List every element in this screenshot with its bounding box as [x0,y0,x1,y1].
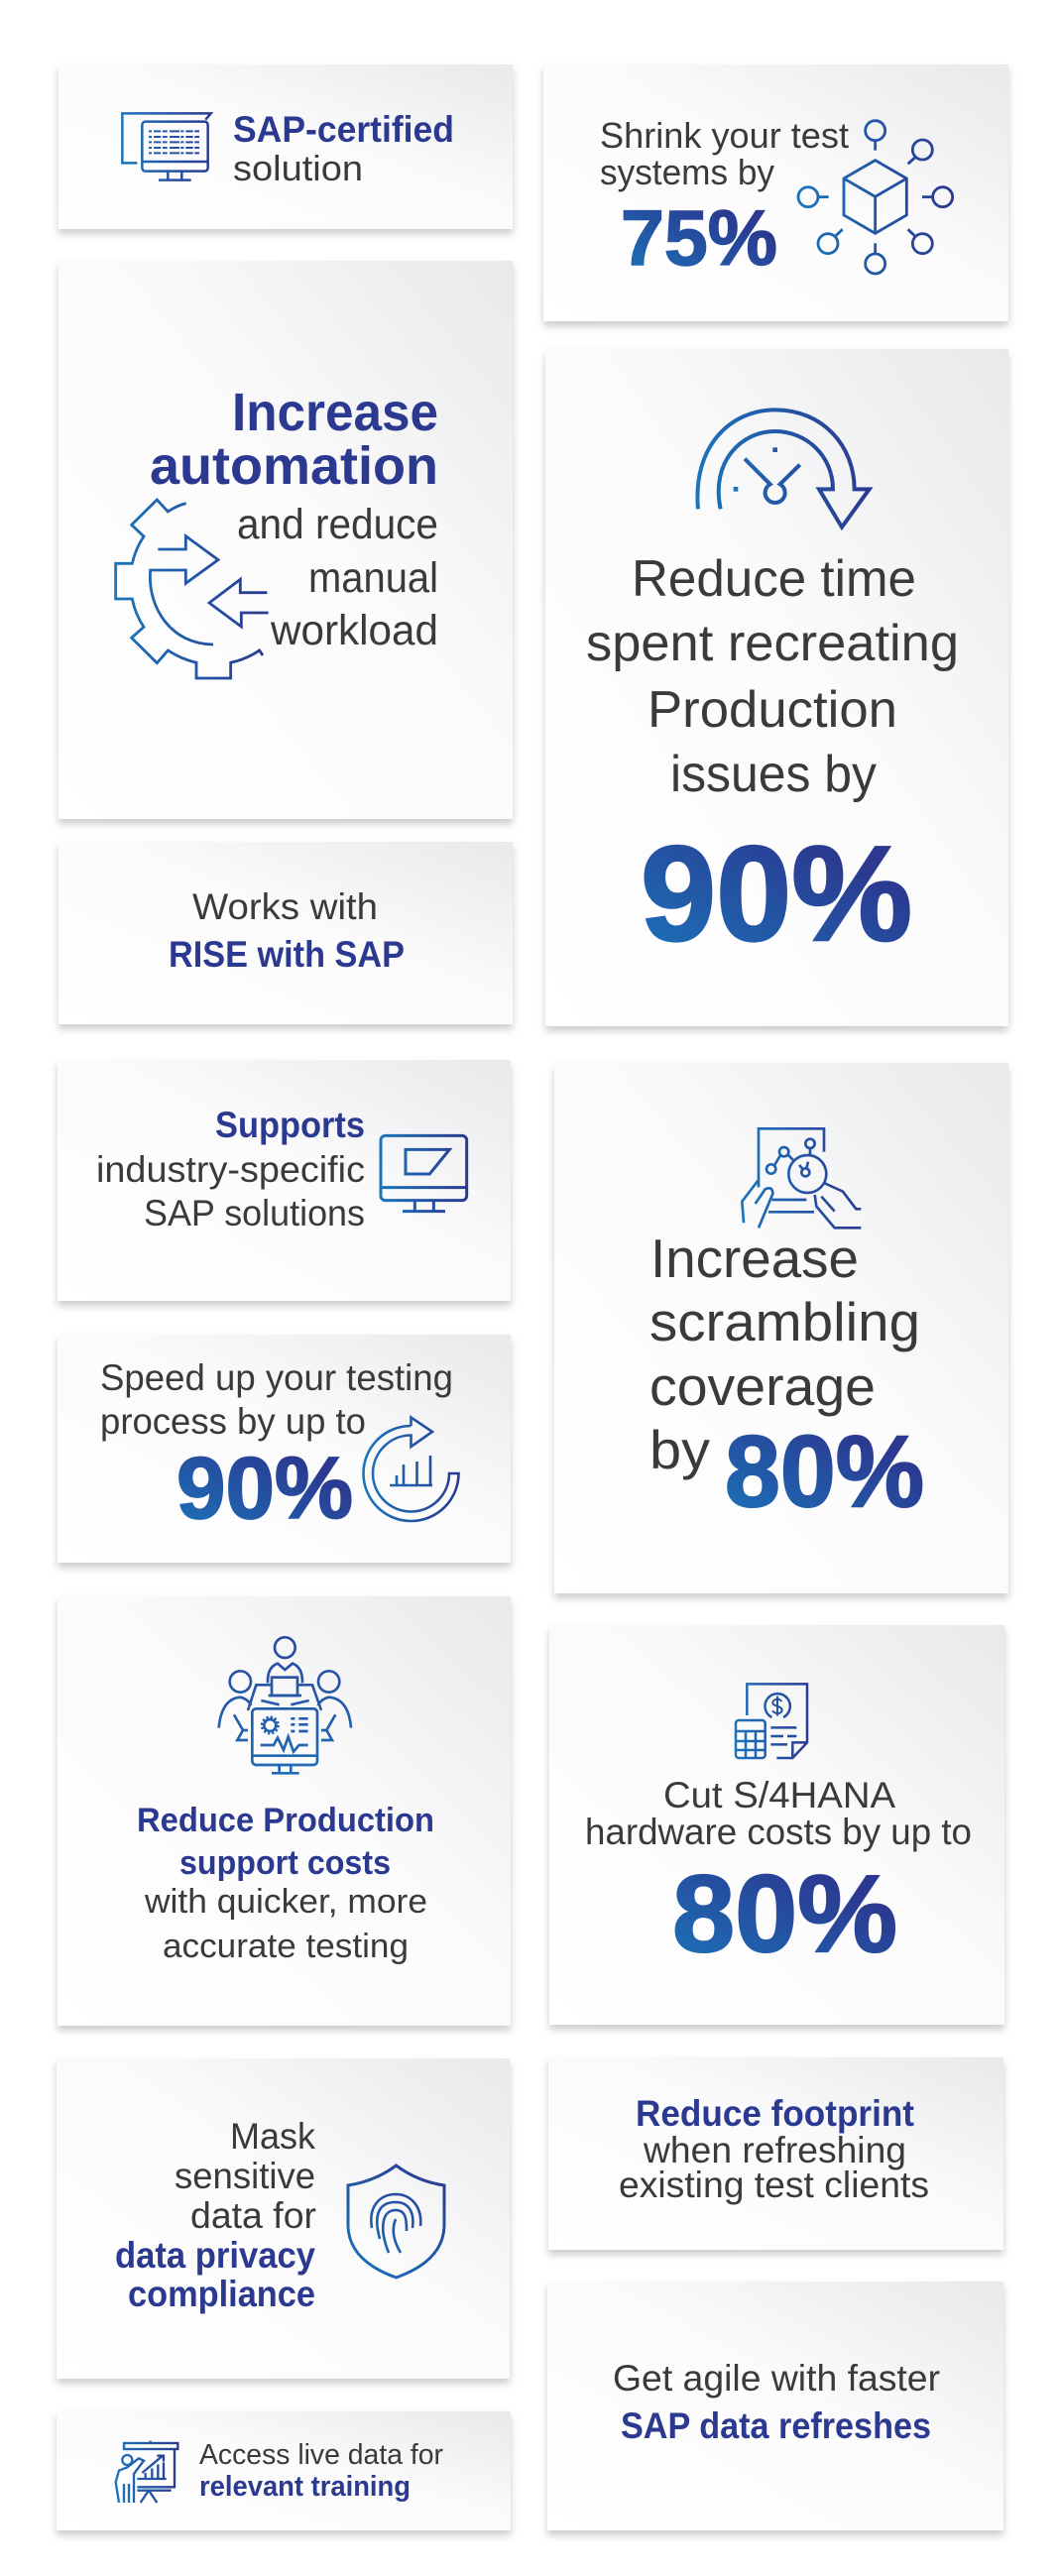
card background [543,64,1008,321]
text: access live data for relevant training: relevant training [199,2471,411,2503]
text: reduce footprint when refreshing existing test clients: when refreshing [643,2130,906,2170]
panel: reduce production support costs [58,1596,511,2026]
panel: access live data for training [57,2411,511,2530]
text: works with RISE with SAP: Works with [192,886,378,927]
text: SAP-certified solution: solution [233,148,363,188]
text: access live data for relevant training [199,2439,443,2503]
card background [554,1063,1008,1593]
text: reduce production support costs with quicker, more accurate testing: Reduce Production [137,1802,434,1839]
icon: shield with fingerprint [348,2166,444,2278]
panel: reduce footprint [548,2057,1003,2250]
text: reduce production support costs with quicker, more accurate testing: accurate testing [163,1928,409,1965]
text: increase automation and reduce manual workload: automation [150,436,438,496]
text: reduce time spent recreating production issues by: issues by [670,746,877,803]
text: cut S/4HANA hardware costs by up to: Cut S/4HANA [663,1775,895,1815]
card background [547,2282,1003,2530]
number: 80%: 80% [672,1853,897,1975]
panel: supports industry-specific solutions [58,1060,511,1301]
panel: speed up testing process [58,1335,511,1563]
number: 90%: 90% [177,1439,353,1537]
text: speed up your testing process by up to: process by up to [100,1401,366,1442]
icon: gear with arrows [116,500,269,678]
icon: presenter with chart [116,2441,177,2503]
text: reduce footprint when refreshing existing test clients: Reduce footprint [636,2093,914,2134]
text: reduce time spent recreating production issues by [586,550,959,803]
text: increase scrambling coverage by [649,1228,920,1480]
text: increase scrambling coverage by: coverage [649,1355,876,1417]
text: get agile with faster SAP data refreshes: SAP data refreshes [621,2405,931,2446]
icon: monitor with code [122,113,211,180]
text: cut S/4HANA hardware costs by up to: hardware costs by up to [585,1812,972,1852]
text: increase scrambling coverage by: scrambling [649,1291,920,1352]
card background [59,842,513,1024]
number: 90%: 90% [641,818,912,969]
text: works with RISE with SAP: RISE with SAP [169,934,405,975]
icon: cube network [798,121,953,274]
icon: team around monitor [219,1637,351,1773]
text: access live data for relevant training: Access live data for [199,2439,443,2471]
text: mask sensitive data for data privacy compliance: data privacy [115,2235,315,2276]
text: get agile with faster SAP data refreshes [613,2358,940,2446]
panel: cut S/4HANA hardware costs [549,1625,1004,2025]
text: supports industry-specific SAP solutions: Supports [215,1105,365,1145]
text: mask sensitive data for data privacy compliance: Mask [230,2116,315,2157]
card background [549,1625,1004,2025]
text: get agile with faster SAP data refreshes: Get agile with faster [613,2358,940,2399]
card background [58,1335,511,1563]
text: reduce time spent recreating production issues by: Production [648,681,897,739]
text: increase automation and reduce manual workload: manual [308,554,438,602]
text: increase automation and reduce manual workload: workload [270,607,438,654]
panel: increase automation [59,261,513,819]
card background [57,2411,511,2530]
text: reduce production support costs with quicker, more accurate testing: with quicker, more [144,1883,427,1921]
card background [58,1596,511,2026]
text: cut S/4HANA hardware costs by up to [585,1775,972,1852]
card background [57,2058,510,2379]
panel: reduce time recreating issues [545,349,1008,1026]
text: increase automation and reduce manual workload [150,383,438,654]
text: reduce footprint when refreshing existing test clients [619,2093,929,2205]
text: mask sensitive data for data privacy compliance: compliance [128,2274,315,2314]
text: shrink your test systems by [600,115,849,192]
text: shrink your test systems by: systems by [600,152,774,192]
card background [59,261,513,819]
icon: invoice and calculator [736,1684,807,1758]
text: SAP-certified solution: SAP-certified [233,109,454,150]
text: mask sensitive data for data privacy compliance: sensitive [175,2156,315,2196]
text: SAP-certified solution [233,109,454,188]
text: increase scrambling coverage by: by [649,1419,711,1480]
panel: SAP-certified solution [59,64,513,229]
text: reduce time spent recreating production issues by: Reduce time [632,550,916,608]
text: supports industry-specific SAP solutions: industry-specific [96,1149,365,1190]
text: increase scrambling coverage by: Increase [650,1228,859,1289]
number: 75%: 75% [621,193,777,282]
panel: works with RISE with SAP [59,842,513,1024]
panel: shrink test systems [543,64,1008,321]
text: supports industry-specific SAP solutions: SAP solutions [144,1193,365,1233]
card background [59,64,513,229]
number: 80%: 80% [725,1415,924,1528]
icon: refresh with bar chart [363,1418,458,1521]
text: mask sensitive data for data privacy compliance: data for [190,2195,316,2236]
text: speed up your testing process by up to [100,1357,453,1442]
icon: clock with arrow [697,410,870,527]
panel: mask sensitive data [57,2058,510,2379]
text: works with RISE with SAP [169,886,405,975]
text: increase automation and reduce manual workload: Increase [232,383,438,442]
card background [58,1060,511,1301]
text: reduce time spent recreating production issues by: spent recreating [586,615,959,672]
text: speed up your testing process by up to: Speed up your testing [100,1357,453,1398]
text: shrink your test systems by: Shrink your test [600,115,849,156]
text: reduce production support costs with quicker, more accurate testing: support costs [179,1844,391,1882]
text: supports industry-specific SAP solutions [96,1105,365,1233]
text: reduce footprint when refreshing existing test clients: existing test clients [619,2165,929,2205]
text: increase automation and reduce manual workload: and reduce [237,501,438,548]
panel: get agile with faster refreshes [547,2282,1003,2530]
text: mask sensitive data for data privacy compliance [115,2116,316,2314]
icon: hands with magnifier on document [742,1128,861,1228]
icon: monitor [381,1135,467,1212]
panel: increase scrambling coverage [554,1063,1008,1593]
card background [545,349,1008,1026]
text: reduce production support costs with quicker, more accurate testing [137,1802,434,1965]
card background [548,2057,1003,2250]
